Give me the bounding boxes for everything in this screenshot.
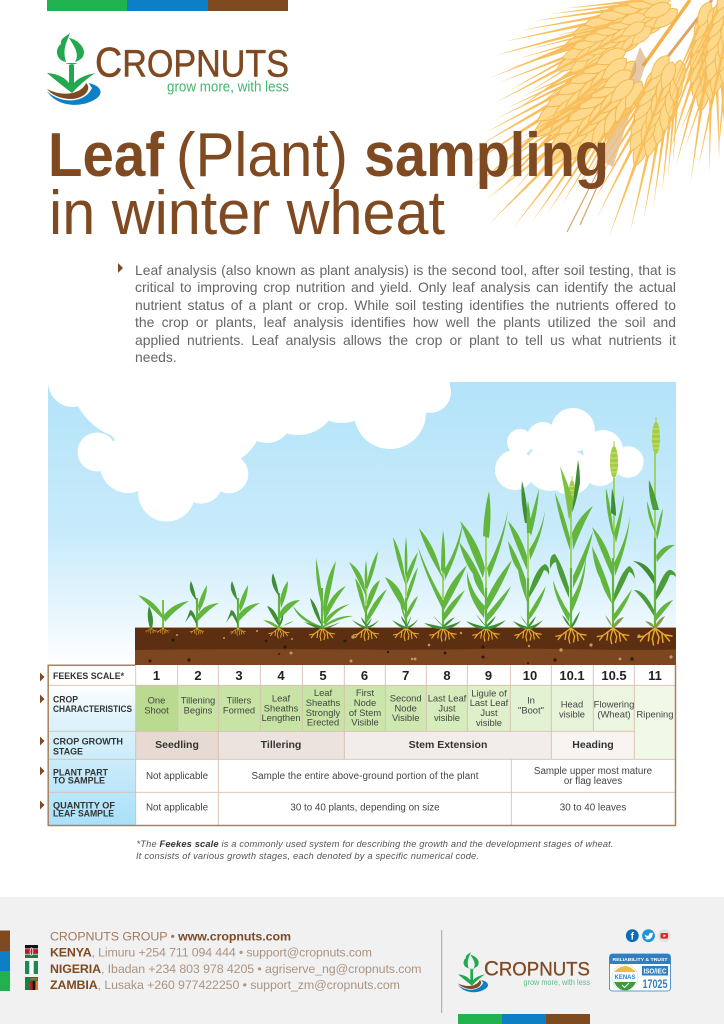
plant part and quantity cells: Sample upper most mature xyxy=(534,766,653,777)
crop characteristics cells: visible xyxy=(476,717,502,728)
plant: Feekes 11 xyxy=(633,417,676,646)
footer logo xyxy=(458,952,590,992)
crop characteristics cells: Flowering xyxy=(594,699,634,710)
badge: ISO/IEC 17025: RELIABILITY & TRUST xyxy=(612,957,668,962)
row labels: TO SAMPLE xyxy=(53,776,105,787)
crop characteristics cells: First xyxy=(356,687,375,698)
crop characteristics cells: Shoot xyxy=(144,704,169,715)
Feekes scale numbers: 5 xyxy=(319,668,327,683)
table xyxy=(40,665,676,826)
intro paragraph: critical to improving crop nutrition and yield. Only leaf analysis can identify the actual xyxy=(135,279,676,295)
intro paragraph: applied nutrients. Leaf analysis allows the crop or plant to tell us what nutrients it xyxy=(135,332,676,348)
soil xyxy=(135,628,676,666)
crop characteristics cells: Formed xyxy=(223,704,255,715)
crop growth stages: Stem Extension xyxy=(409,739,487,751)
icon: youtube xyxy=(658,929,671,942)
contact text: CROPNUTS GROUP • www.cropnuts.com xyxy=(50,930,291,944)
crop characteristics cells: Just xyxy=(480,707,498,718)
intro paragraph: Leaf analysis (also known as plant analysis) is the second tool, after soil testing, that is xyxy=(135,262,676,278)
crop characteristics cells: Visible xyxy=(392,712,419,723)
crop characteristics cells: Leaf xyxy=(314,687,333,698)
logo wordmark: CROPNUTS xyxy=(95,39,289,86)
crop growth stages: Heading xyxy=(572,739,614,751)
crop characteristics cells: Node xyxy=(354,697,376,708)
Feekes scale numbers: 9 xyxy=(485,668,492,683)
crop growth stages: Seedling xyxy=(155,739,199,751)
row labels: QUANTITY OF xyxy=(53,800,115,811)
plant: Feekes 10.5 xyxy=(592,441,635,644)
row labels: CROP xyxy=(53,694,79,705)
icon: facebook xyxy=(626,929,639,943)
crop characteristics cells: One xyxy=(148,694,165,705)
footer logo: grow more, with less xyxy=(524,978,590,987)
wheat ears decoration xyxy=(440,0,724,257)
plant: Feekes 10 xyxy=(508,481,549,642)
crop characteristics cells: Last Leaf xyxy=(470,697,509,708)
row labels: CHARACTERISTICS xyxy=(53,704,132,715)
crop characteristics cells: (Wheat) xyxy=(597,709,631,720)
footer side colour bar xyxy=(0,930,10,991)
crop characteristics cells: visible xyxy=(559,709,585,720)
row arrows xyxy=(40,672,44,810)
plant part and quantity cells: or flag leaves xyxy=(564,776,622,787)
plant part and quantity cells xyxy=(146,766,653,814)
crop characteristics cells: Strongly xyxy=(306,707,341,718)
crop characteristics cells: Ripening xyxy=(636,709,674,720)
flag: Nigeria xyxy=(25,961,38,974)
row labels: PLANT PART xyxy=(53,767,108,778)
footer logo: CROPNUTS xyxy=(484,957,590,981)
plant: Feekes 3 xyxy=(226,581,260,636)
crop characteristics cells xyxy=(144,687,674,728)
intro bullet arrow xyxy=(118,263,123,273)
Feekes scale numbers: 10.1 xyxy=(559,668,585,683)
icon: facebook: f xyxy=(631,932,635,943)
crop characteristics cells: Leaf xyxy=(272,693,291,704)
crop characteristics cells: Begins xyxy=(184,704,213,715)
crop characteristics cells: Visible xyxy=(351,717,379,728)
footer panel xyxy=(0,897,724,1024)
badge: ISO/IEC 17025: KENAS xyxy=(614,975,636,981)
row labels xyxy=(53,671,132,820)
crop characteristics cells: Second xyxy=(390,693,422,704)
intro paragraph: needs. xyxy=(135,349,177,365)
plant part and quantity cells: Not applicable xyxy=(146,771,209,782)
plant: Feekes 2 xyxy=(185,581,219,635)
row labels: FEEKES SCALE* xyxy=(53,671,124,682)
intro paragraph: nutrient status of a plant or crop. While soil testing identifies the nutrients offered to xyxy=(135,296,676,312)
crop characteristics cells: Sheaths xyxy=(306,697,341,708)
cloud: right xyxy=(495,408,644,495)
plant part and quantity cells: Not applicable xyxy=(146,803,209,814)
crop characteristics cells: Ligule of xyxy=(471,688,507,698)
plant: Feekes 4 xyxy=(263,573,300,638)
logo tagline: grow more, with less xyxy=(167,78,289,96)
table rules xyxy=(48,665,676,826)
contact text xyxy=(50,930,422,992)
Feekes scale numbers: 8 xyxy=(443,668,451,683)
plant: Feekes 6 xyxy=(349,551,387,641)
title: Leaf xyxy=(48,121,164,190)
footnote xyxy=(136,839,614,861)
top colour bar xyxy=(47,0,288,11)
flag: Zambia xyxy=(25,977,38,990)
Feekes scale numbers: 7 xyxy=(402,668,409,683)
plant part and quantity cells: Sample the entire above-ground portion of the plant xyxy=(252,771,479,782)
flag: Kenya xyxy=(25,945,38,958)
logo xyxy=(47,33,289,105)
plant: Feekes 8 xyxy=(418,521,467,642)
crop characteristics cells: Head xyxy=(561,699,583,710)
crop characteristics cells: Sheaths xyxy=(264,702,299,713)
title: sampling xyxy=(364,121,609,190)
footnote: It consists of various growth stages, each denoted by a specific numerical code. xyxy=(136,851,479,861)
contact text: KENYA, Limuru +254 711 094 444 • support@cropnuts.com xyxy=(50,946,372,960)
crop characteristics cells: Last Leaf xyxy=(428,693,467,704)
contact text: NIGERIA, Ibadan +234 803 978 4205 • agriserve_ng@cropnuts.com xyxy=(50,962,422,976)
crop characteristics cells: Erected xyxy=(307,717,339,728)
Feekes scale numbers xyxy=(153,668,662,683)
crop characteristics cells: Tillers xyxy=(227,694,252,705)
intro paragraph xyxy=(135,262,676,365)
intro paragraph: the crop or plants, leaf analysis identifies how well the plants utilized the soil and xyxy=(135,314,676,330)
logo mark xyxy=(47,33,101,105)
crop characteristics cells: Just xyxy=(438,702,456,713)
crop characteristics cells: Node xyxy=(394,702,417,713)
plant part and quantity cells: 30 to 40 plants, depending on size xyxy=(290,803,440,814)
cloud: large upper left xyxy=(48,382,451,522)
crop characteristics cells: of Stem xyxy=(349,707,381,718)
Feekes scale numbers: 10 xyxy=(523,668,537,683)
row labels: STAGE xyxy=(53,746,83,757)
icon: twitter xyxy=(642,929,655,942)
crop growth stages xyxy=(155,739,614,751)
Feekes scale numbers: 10.5 xyxy=(601,668,627,683)
badge: ISO/IEC 17025: ISO/IEC xyxy=(644,966,667,976)
table fills xyxy=(48,665,676,826)
Feekes scale numbers: 6 xyxy=(361,668,368,683)
crop characteristics cells: Tillening xyxy=(181,694,215,705)
footnote: *The Feekes scale is a commonly used system for describing the growth and the development stages of wheat. xyxy=(136,839,614,849)
sky scene xyxy=(48,382,676,665)
badge: ISO/IEC 17025 xyxy=(610,954,670,991)
plant: Feekes 9 xyxy=(459,491,512,642)
plant: Feekes 5 xyxy=(293,558,353,641)
table outer border xyxy=(48,665,675,826)
plant: Feekes 1 xyxy=(138,595,189,634)
footer divider xyxy=(441,930,443,1013)
plant: Feekes 7 xyxy=(385,537,419,641)
crop characteristics cells: visible xyxy=(434,712,460,723)
crop growth stages: Tillering xyxy=(261,739,301,751)
crop characteristics cells: "Boot" xyxy=(518,704,544,715)
crop characteristics cells: Lengthen xyxy=(261,712,301,723)
row labels: CROP GROWTH xyxy=(53,736,123,747)
row labels: LEAF SAMPLE xyxy=(53,809,114,820)
title: (Plant) xyxy=(176,121,348,190)
Feekes scale numbers: 3 xyxy=(235,668,243,683)
footer bottom colour bar xyxy=(458,1014,590,1024)
contact text: ZAMBIA, Lusaka +260 977422250 • support_zm@cropnuts.com xyxy=(50,978,400,992)
Feekes scale numbers: 1 xyxy=(153,668,160,683)
Feekes scale numbers: 2 xyxy=(194,668,202,683)
title xyxy=(48,121,609,248)
title: in winter wheat xyxy=(49,179,445,248)
crop characteristics cells: In xyxy=(527,694,535,705)
Feekes scale numbers: 4 xyxy=(277,668,285,683)
badge: ISO/IEC 17025: 17025 xyxy=(642,977,668,991)
plant part and quantity cells: 30 to 40 leaves xyxy=(560,803,626,814)
Feekes scale numbers: 11 xyxy=(648,668,662,683)
plant: Feekes 10.1 xyxy=(550,460,593,644)
